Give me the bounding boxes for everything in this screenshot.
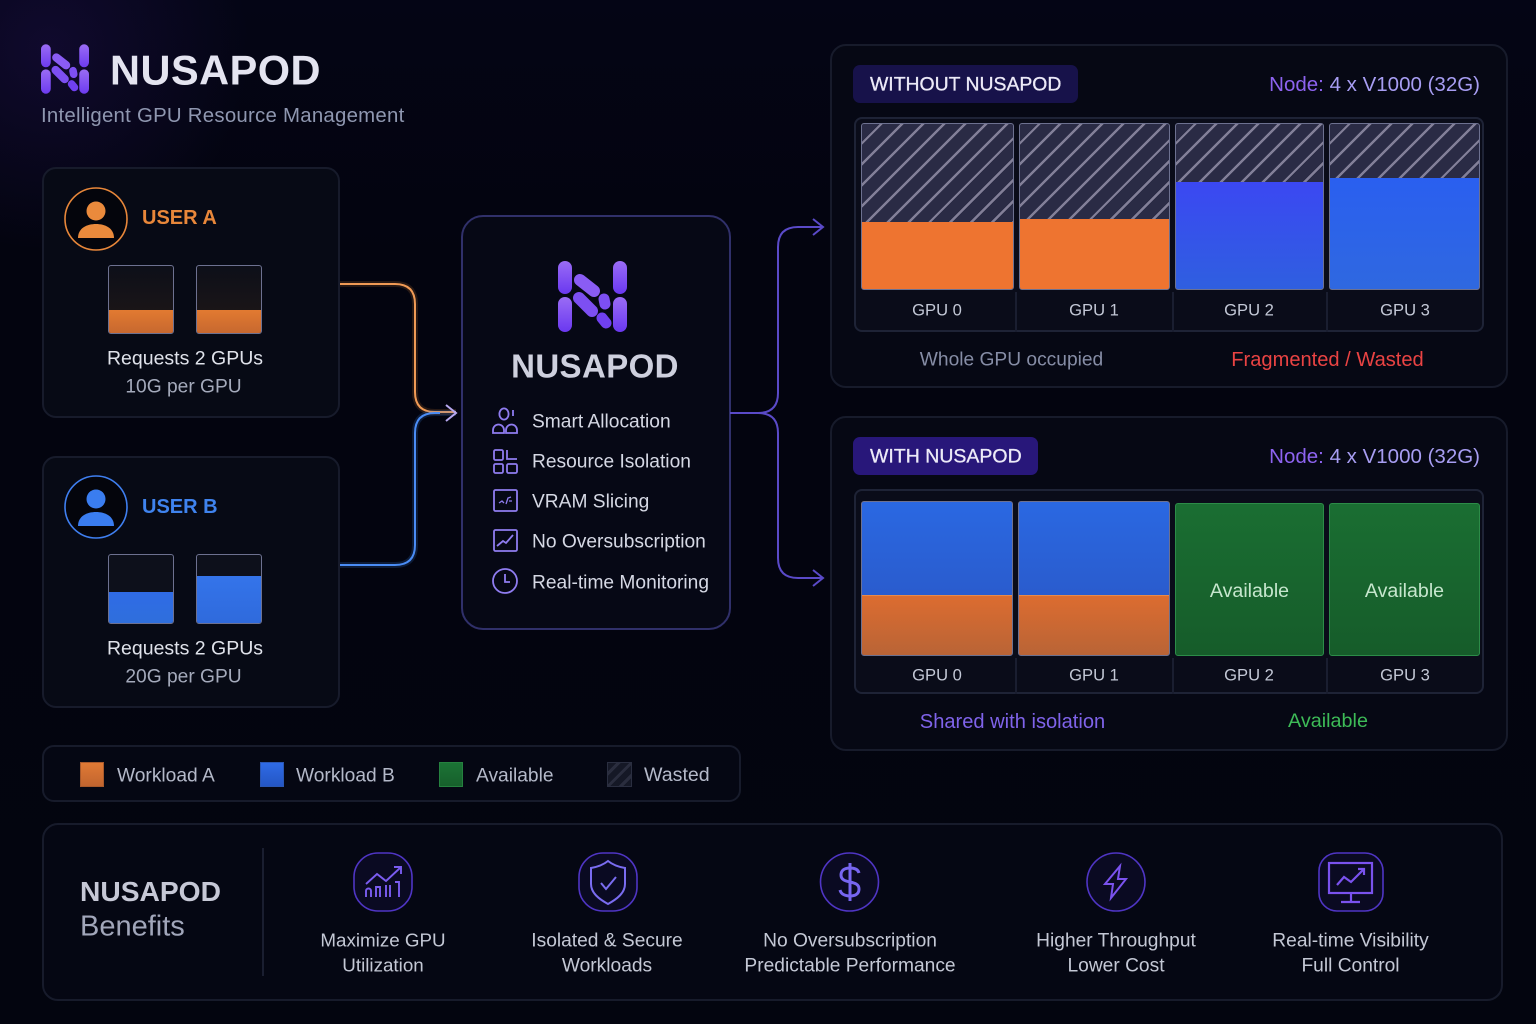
caption: available: Available [1288,710,1368,732]
legend text: workload B: Workload B [296,765,395,786]
panel: benefits [42,823,1503,1001]
feature: No Oversubscription [493,529,706,552]
request text: Requests 2 GPUs [107,347,263,369]
GPU request bar 2 [196,554,262,624]
text: Real-time Visibility [1272,930,1429,951]
caption: whole GPU: Whole GPU occupied [920,349,1103,370]
text: Higher Throughput [1036,930,1196,951]
swatch: workload B [260,762,284,787]
node label: Node: 4 x V1000 (32G) [1269,73,1480,96]
GPU 1 bar [1019,123,1170,290]
legend text: available: Available [476,765,554,786]
label: user A: USER A [142,207,217,229]
request text: Requests 2 GPUs [107,637,263,659]
panel: with NUSAPOD [830,416,1508,751]
text: Smart Allocation [532,411,671,432]
icon: line chart [493,529,518,552]
label: user B: USER B [142,496,218,518]
title: NUSAPOD [110,46,321,93]
heading: NUSAPOD [511,348,679,384]
node label: Node: 4 x V1000 (32G) [1269,445,1480,468]
benefit: isolated [531,852,683,976]
GPU request bar 1 [108,554,174,624]
benefit: oversubscription: Predictable Performance [744,955,956,976]
GPU 2 available [1175,503,1324,656]
panel: without NUSAPOD [830,44,1508,388]
benefit: visibility [1272,852,1429,976]
icon: clock [492,568,518,594]
icon: user B avatar [64,475,128,539]
GPU 0 bar [861,501,1013,656]
header: logo and title [41,44,405,127]
GPU request bar 1 [108,265,174,334]
text: Maximize GPU [320,930,446,951]
swatch: wasted [607,762,632,787]
GPU 0 label: GPU 0 [912,301,962,320]
swatch: workload A [80,762,104,787]
badge: without NUSAPOD [853,65,1078,103]
icon: users [492,408,518,434]
panel: user B [42,456,340,708]
subtitle: Intelligent GPU Resource Management [41,105,405,127]
arrow: user B to NUSAPOD [340,404,458,568]
benefits heading: Benefits [80,910,185,942]
benefit: isolated: Workloads [562,955,652,976]
GPU 2 label: GPU 2 [1224,666,1274,685]
icon: bolt [1086,852,1146,912]
feature: Smart Allocation [492,408,671,434]
benefit: throughput: Lower Cost [1067,955,1165,976]
caption: shared: Shared with isolation [920,711,1105,733]
legend text: wasted: Wasted [644,764,710,786]
GPU 0 label: GPU 0 [912,666,962,685]
benefits heading: NUSAPOD [80,875,221,907]
icon: shield [578,852,638,912]
per GPU text: 10G per GPU [125,376,242,397]
GPU 1 label: GPU 1 [1069,301,1119,320]
icon: NUSAPOD logo [558,261,627,332]
icon: slicing chart [493,489,518,512]
arrow: user A to NUSAPOD [340,281,456,415]
GPU 0 bar [861,123,1014,290]
GPU 2 bar [1175,123,1324,290]
benefit: visibility: Full Control [1301,955,1400,976]
GPU 3 label: GPU 3 [1380,301,1430,320]
text: Resource Isolation [532,451,691,472]
swatch: available [439,762,463,787]
benefit: utilization [320,852,446,976]
icon: NUSAPOD logo [41,44,89,94]
benefit: oversubscription [744,852,956,976]
feature: VRAM Slicing [493,489,649,512]
feature: Resource Isolation [493,449,691,474]
GPU 3 label: GPU 3 [1380,666,1430,685]
benefit: utilization: Utilization [342,955,424,976]
GPU 1 label: GPU 1 [1069,666,1119,685]
benefits heading [80,875,221,942]
arrow: NUSAPOD to without panel [758,218,824,413]
icon: monitor [1318,852,1384,912]
separators [1015,658,1017,694]
benefit: throughput [1036,852,1196,976]
text: VRAM Slicing [532,491,649,512]
legend text: workload A: Workload A [117,765,215,786]
GPU 3 bar [1329,123,1480,290]
text: Isolated & Secure [531,930,683,951]
icon: user A avatar [64,187,128,251]
caption: fragmented: Fragmented / Wasted [1231,348,1424,370]
GPU 2 available: Available [1210,580,1289,602]
separators [1015,292,1017,332]
badge: without NUSAPOD: WITHOUT NUSAPOD [870,73,1061,95]
GPU 2 label: GPU 2 [1224,301,1274,320]
GPU request bar 2 [196,265,262,334]
icon: growth chart [353,852,413,912]
per GPU text: 20G per GPU [125,666,242,687]
divider [262,848,264,976]
text: Real-time Monitoring [532,572,709,593]
icon: grid [493,449,518,474]
text: No Oversubscription [532,531,706,552]
GPU frame [854,489,1484,694]
badge: with NUSAPOD [853,437,1038,475]
feature: Real-time Monitoring [492,568,709,594]
legend [42,745,741,802]
GPU 3 available: Available [1365,580,1444,602]
GPU 3 available [1329,503,1480,656]
GPU frame [854,117,1484,332]
badge: with NUSAPOD: WITH NUSAPOD [870,445,1022,467]
arrow: NUSAPOD to with panel [758,413,824,587]
GPU 1 bar [1018,501,1170,656]
panel: user A [42,167,340,418]
icon: dollar [820,852,880,912]
text: No Oversubscription [763,930,937,951]
panel: NUSAPOD core [461,215,731,630]
